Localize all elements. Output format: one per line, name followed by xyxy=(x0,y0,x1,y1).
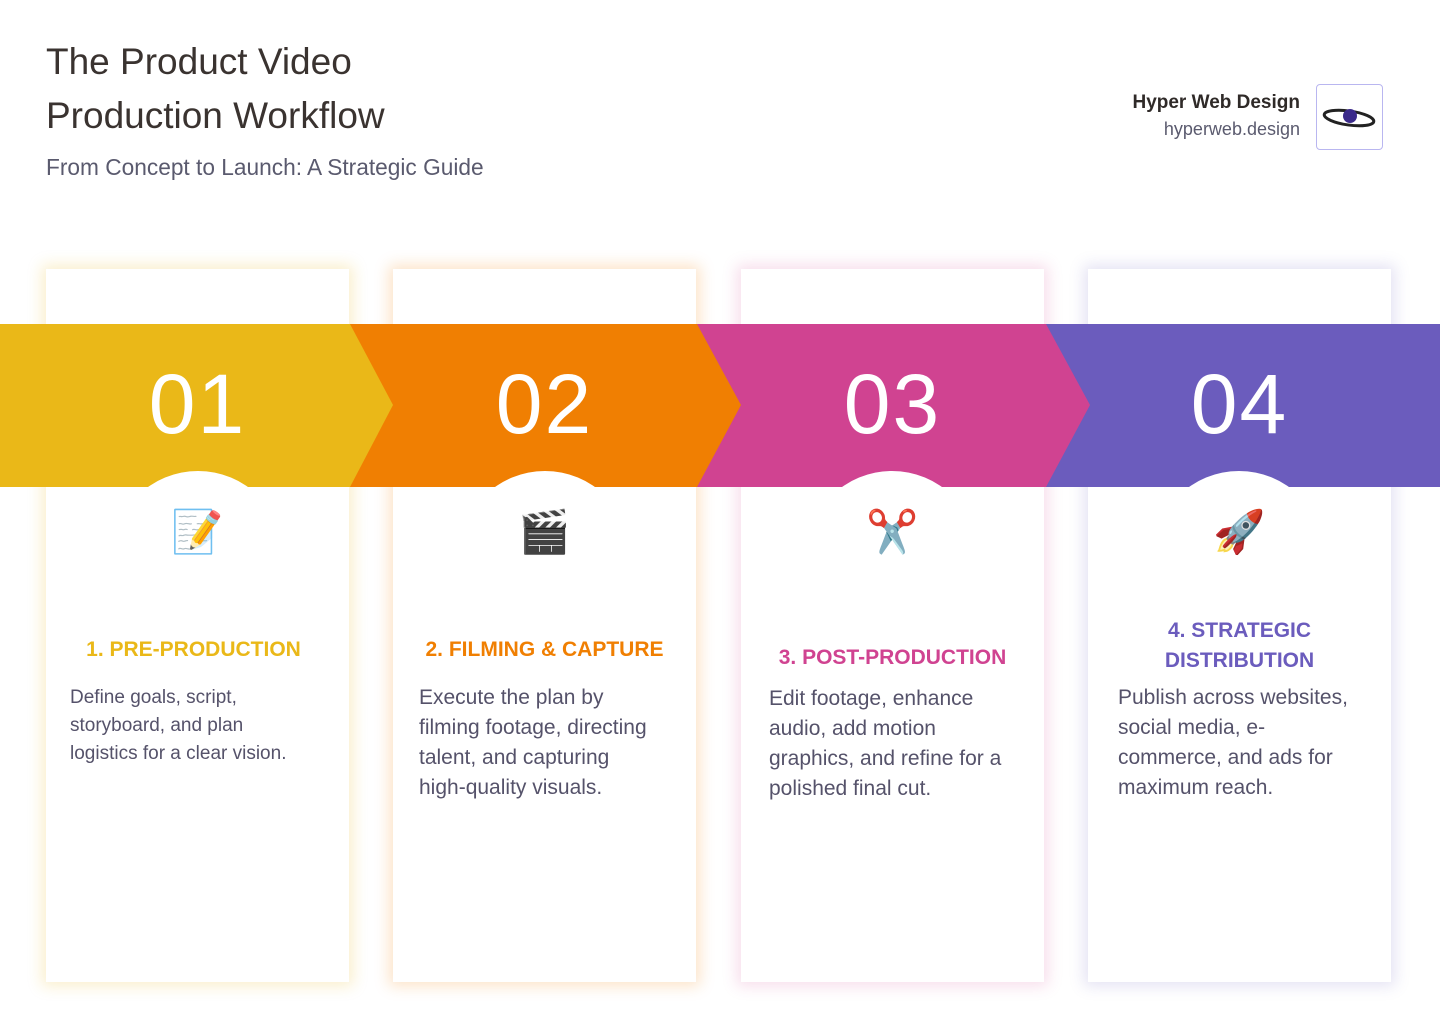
description 4: maximum reach. xyxy=(1118,776,1273,799)
title: Production Workflow xyxy=(46,95,385,136)
description 1: logistics for a clear vision. xyxy=(70,743,286,764)
heading 3: 3. POST-PRODUCTION xyxy=(779,646,1006,669)
number 03: 03 xyxy=(844,357,941,451)
description 3: graphics, and refine for a xyxy=(769,747,1001,770)
description 2: high-quality visuals. xyxy=(419,776,602,799)
number 04: 04 xyxy=(1191,357,1288,451)
subtitle: From Concept to Launch: A Strategic Guide xyxy=(46,154,484,180)
arrow band xyxy=(0,324,1440,487)
description 1 xyxy=(70,687,286,764)
brand name: Hyper Web Design xyxy=(1132,92,1300,113)
description 2: Execute the plan by xyxy=(419,686,603,709)
description 4: Publish across websites, xyxy=(1118,686,1348,709)
card 1 glow xyxy=(46,269,349,982)
icon: clapper: 🎬 xyxy=(518,508,571,557)
heading 4: DISTRIBUTION xyxy=(1165,649,1314,672)
icon: scissors: ✂️ xyxy=(866,508,919,557)
number 02: 02 xyxy=(496,357,593,451)
card 4 glow xyxy=(1088,269,1391,982)
card 2 glow xyxy=(393,269,696,982)
panel: step 1 xyxy=(70,357,301,764)
description 4 xyxy=(1118,686,1348,799)
icon: memo: 📝 xyxy=(171,508,224,557)
panel: step 4 xyxy=(1118,357,1348,799)
brand url: hyperweb.design xyxy=(1164,119,1300,139)
heading 4: 4. STRATEGIC xyxy=(1168,619,1311,642)
description 2 xyxy=(419,686,647,799)
description 1: Define goals, script, xyxy=(70,687,237,708)
description 4: commerce, and ads for xyxy=(1118,746,1333,769)
panel: step 2 xyxy=(419,357,664,799)
description 4: social media, e- xyxy=(1118,716,1265,739)
brand block xyxy=(1132,84,1383,150)
title xyxy=(46,41,385,136)
description 2: talent, and capturing xyxy=(419,746,609,769)
description 3: audio, add motion xyxy=(769,717,936,740)
description 3 xyxy=(769,687,1002,800)
icon: rocket: 🚀 xyxy=(1213,508,1266,557)
heading 2: 2. FILMING & CAPTURE xyxy=(425,638,664,661)
description 3: polished final cut. xyxy=(769,777,931,800)
heading 4 xyxy=(1165,619,1314,672)
description 2: filming footage, directing xyxy=(419,716,647,739)
number 01: 01 xyxy=(149,357,246,451)
card 3 glow xyxy=(741,269,1044,982)
title: The Product Video xyxy=(46,41,352,82)
panel: step 3 xyxy=(769,357,1006,800)
description 1: storyboard, and plan xyxy=(70,715,243,736)
icon: logo xyxy=(1316,84,1383,150)
heading 1: 1. PRE-PRODUCTION xyxy=(86,638,301,661)
description 3: Edit footage, enhance xyxy=(769,687,973,710)
